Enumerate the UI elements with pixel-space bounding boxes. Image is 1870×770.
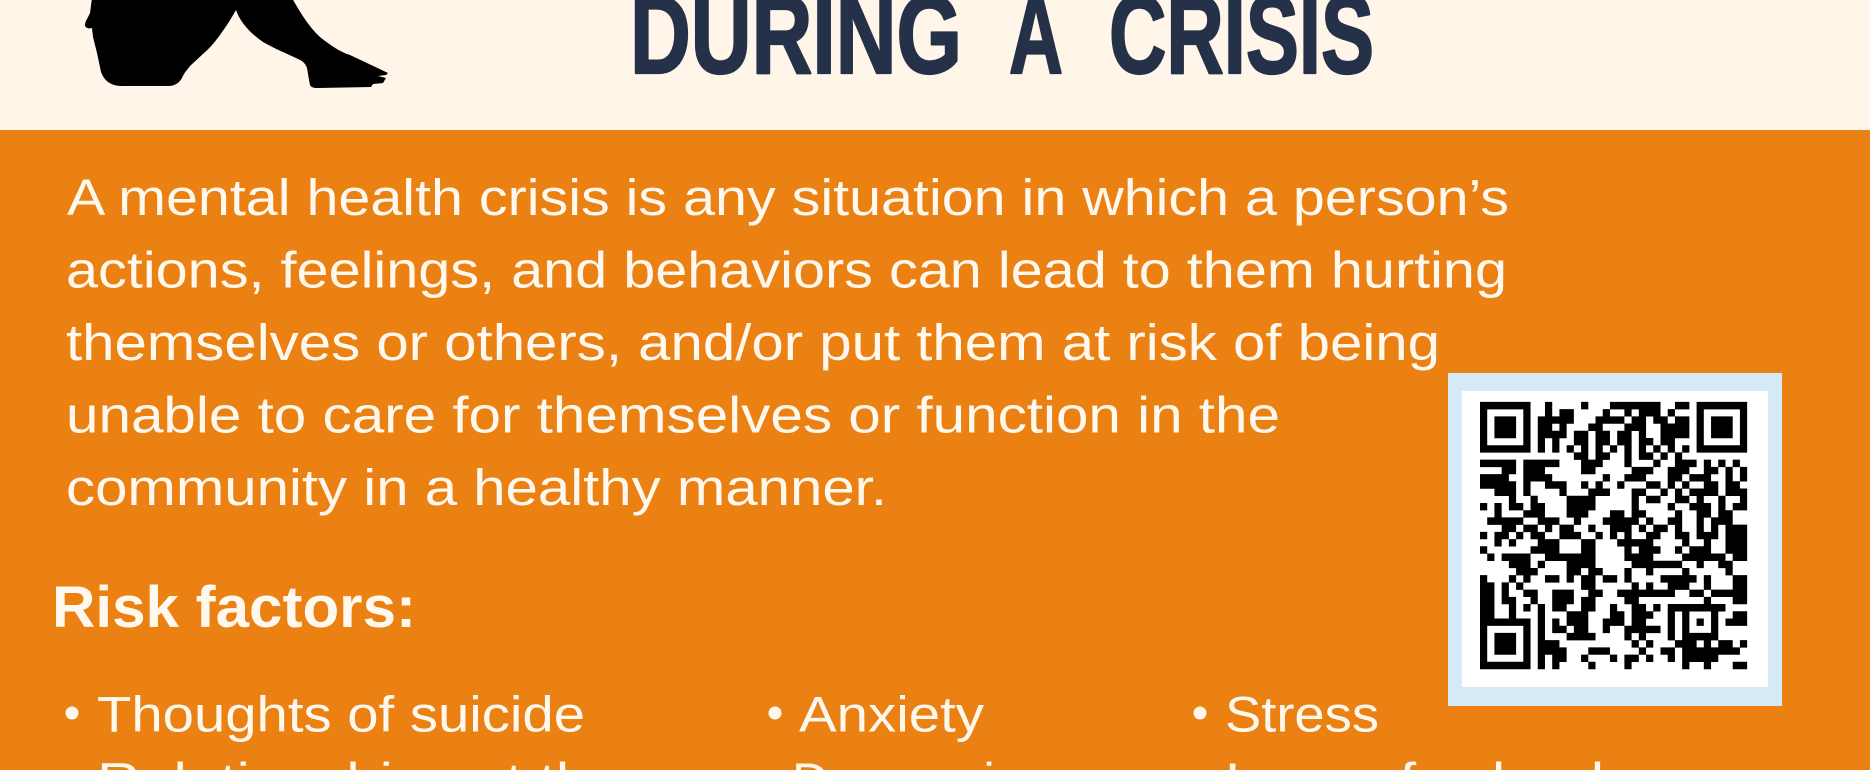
icon: seated person silhouette: [85, 0, 388, 88]
text block: definition of a mental health crisis: A mental health crisis is any situation in which a person’s: [67, 169, 1509, 226]
text block: definition of a mental health crisis: community in a healthy manner.: [66, 459, 887, 516]
text block: definition of a mental health crisis: themselves or others, and/or put them at risk of being: [66, 314, 1440, 371]
QR code modules: [1480, 406, 1747, 666]
list: risk factor bullets: Thoughts of suicide: [97, 686, 585, 742]
list: risk factor bullets: Anxiety: [799, 686, 984, 742]
QR code card: [1448, 373, 1782, 706]
heading: risk factors: Risk factors:: [52, 575, 416, 640]
text block: definition of a mental health crisis: actions, feelings, and behaviors can lead to them hurting: [66, 242, 1507, 298]
text block: definition of a mental health crisis: [66, 169, 1509, 516]
list: risk factor bullets: Stress: [1225, 686, 1379, 742]
panel: cream header: [0, 0, 1870, 130]
list: risk factor bullets: [66, 686, 1604, 770]
text block: definition of a mental health crisis: unable to care for themselves or function in the: [66, 386, 1280, 444]
